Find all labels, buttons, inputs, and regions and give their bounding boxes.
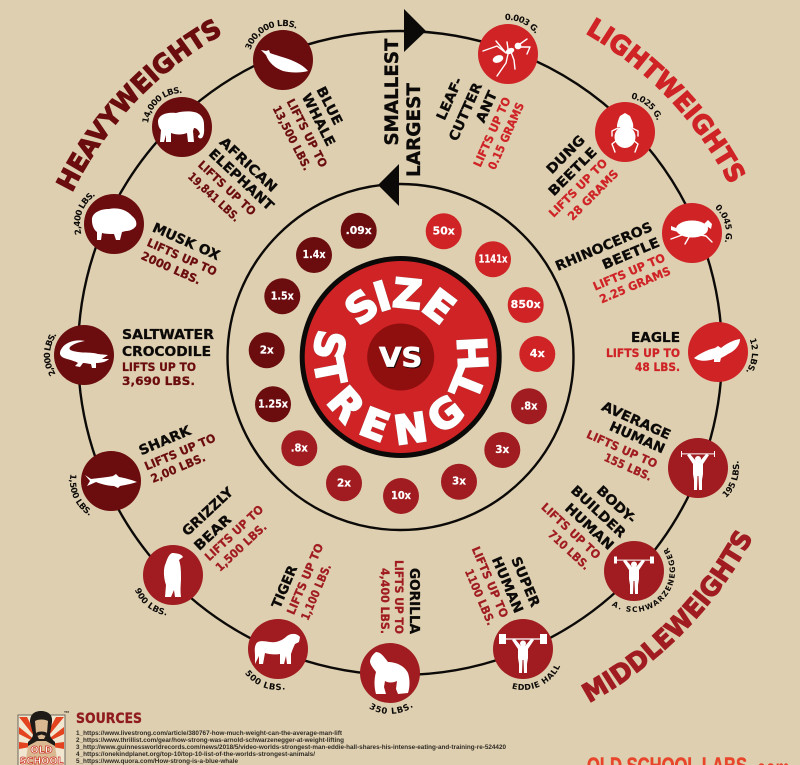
label: smallest: SMALLEST bbox=[381, 38, 403, 146]
icon: dung beetle bbox=[595, 102, 655, 162]
weight: 0.025 G. bbox=[632, 92, 661, 120]
text: 2,00 LBS. bbox=[149, 450, 207, 486]
sources list: 3_http://www.guinnessworldrecords.com/news/2018/5/video-worlds-strongest-man-eddie-hall-shares-his-intense-eating-and-training-re-524420 bbox=[76, 744, 506, 751]
multiplier bubbles: .09x bbox=[346, 225, 372, 237]
sources list: 4_https://onekindplanet.org/top-10/top-10-list-of-the-worlds-strongest-animals/ bbox=[76, 751, 315, 758]
text: LIFTS UP TO bbox=[469, 544, 511, 620]
text: BUILDER bbox=[567, 483, 629, 542]
heading: lightweights: LIGHTWEIGHTS bbox=[586, 17, 746, 182]
text: AVERAGE bbox=[599, 399, 673, 443]
panel: saltwater crocodile bbox=[44, 325, 215, 388]
weight: 500 LBS. bbox=[245, 670, 285, 690]
central badge: size vs strength bbox=[300, 256, 502, 458]
multiplier bubbles: 50x bbox=[433, 226, 455, 238]
text: 1100 LBS. bbox=[462, 567, 498, 627]
text bbox=[139, 220, 223, 287]
text: 1,500 LBS. bbox=[212, 520, 270, 574]
logo: old school bbox=[18, 710, 69, 765]
icon: eddie hall lifter bbox=[493, 619, 553, 679]
text: HUMAN bbox=[561, 500, 617, 554]
multiplier bubbles: 10x bbox=[391, 490, 411, 502]
text bbox=[606, 330, 680, 374]
icon: tiger bbox=[248, 619, 308, 679]
logo: old school: TM bbox=[64, 710, 69, 714]
text: 4,400 LBS. bbox=[378, 568, 392, 634]
icon: elephant bbox=[152, 97, 212, 157]
arrow: smallest direction bbox=[404, 9, 426, 52]
panel: average human bbox=[584, 399, 740, 498]
text bbox=[538, 483, 639, 573]
icon: average lifter bbox=[668, 438, 728, 498]
vs label: VS bbox=[379, 342, 422, 374]
text: 3,690 LBS. bbox=[122, 374, 195, 388]
text bbox=[543, 132, 621, 223]
multiplier bubbles: 1141x bbox=[478, 254, 508, 266]
multiplier bubbles: 1.5x bbox=[271, 290, 294, 302]
text: 1,100 LBS. bbox=[298, 562, 334, 622]
sources list bbox=[76, 730, 506, 765]
panel: super human bbox=[462, 544, 560, 690]
heading: middleweights: MIDDLEWEIGHTS bbox=[580, 530, 752, 703]
panel: tiger bbox=[245, 541, 334, 690]
multiplier bubbles: .8x bbox=[520, 400, 538, 412]
icon: bear bbox=[143, 545, 203, 605]
text: LIFTS UP TO bbox=[195, 158, 259, 218]
text: HUMAN bbox=[488, 554, 526, 616]
text: 28 GRAMS bbox=[565, 167, 621, 223]
icon: musk ox bbox=[84, 194, 144, 254]
text bbox=[378, 560, 422, 635]
text: DUNG bbox=[543, 132, 589, 178]
text: MUSK OX bbox=[150, 220, 223, 264]
weight: 0.003 G. bbox=[505, 14, 538, 34]
text bbox=[122, 327, 215, 388]
text: BEETLE bbox=[600, 235, 662, 273]
panel: leaf-cutter ant bbox=[434, 14, 538, 172]
middle ring bbox=[228, 184, 574, 530]
multiplier bubbles: 3x bbox=[495, 444, 510, 456]
multiplier bubbles bbox=[249, 213, 555, 514]
weight: 2,000 LBS. bbox=[44, 334, 56, 376]
sources list: 5_https://www.quora.com/How-strong-is-a-blue-whale bbox=[76, 758, 238, 765]
text: LEAF- bbox=[434, 75, 466, 123]
text: 710 LBS. bbox=[545, 527, 593, 573]
text: LIFTS UP TO bbox=[546, 156, 610, 220]
text: SALTWATER bbox=[122, 327, 215, 343]
text: 48 LBS. bbox=[635, 360, 680, 374]
text: LIFTS UP TO bbox=[392, 560, 406, 634]
text: 13,500 LBS. bbox=[270, 103, 314, 173]
panel: musk ox bbox=[74, 192, 223, 287]
text: LIFTS UP TO bbox=[145, 235, 219, 279]
weight: 0.045 G. bbox=[716, 204, 732, 242]
weight: EDDIE HALL bbox=[512, 666, 560, 690]
icon: crocodile bbox=[54, 325, 114, 385]
text: CUTTER bbox=[446, 80, 486, 144]
icon: whale bbox=[253, 30, 313, 90]
panel: african elephant bbox=[142, 87, 280, 225]
multiplier bubbles: 4x bbox=[530, 348, 545, 360]
icon: schwarzenegger lifter bbox=[604, 541, 664, 601]
text: LIFTS UP TO bbox=[591, 250, 667, 293]
sources heading: SOURCES bbox=[76, 711, 142, 727]
weight: 900 LBS. bbox=[135, 588, 166, 616]
weight: 12 LBS. bbox=[746, 338, 758, 372]
text: LIFTS UP TO bbox=[538, 500, 604, 562]
text: GRIZZLY bbox=[179, 484, 237, 540]
panel: dung beetle bbox=[543, 92, 661, 223]
text: LIFTS UP TO bbox=[122, 360, 196, 374]
text: SUPER bbox=[507, 554, 543, 610]
text: 19,841 LBS. bbox=[185, 169, 243, 225]
weight: 2,400 LBS. bbox=[74, 192, 95, 235]
weight: 14,000 LBS. bbox=[142, 87, 182, 122]
multiplier bubbles: 850x bbox=[511, 299, 541, 311]
panel: eagle bbox=[606, 322, 758, 382]
weight: 195 LBS. bbox=[722, 461, 740, 498]
text: LIFTS UP TO bbox=[470, 95, 514, 169]
text bbox=[137, 423, 218, 486]
outer ring bbox=[78, 31, 722, 675]
multiplier bubbles: .8x bbox=[291, 442, 308, 454]
text bbox=[179, 484, 270, 574]
text: 155 LBS. bbox=[602, 450, 654, 484]
panel: rhinoceros beetle bbox=[553, 203, 732, 306]
text bbox=[462, 544, 543, 627]
icon: gorilla bbox=[360, 643, 420, 703]
text bbox=[584, 399, 673, 484]
text: ELEPHANT bbox=[205, 146, 277, 215]
icon: shark bbox=[81, 451, 141, 511]
weight: 350 LBS. bbox=[369, 703, 413, 714]
text: BEAR bbox=[191, 511, 235, 554]
icon: ant bbox=[478, 24, 538, 84]
text: LIFTS UP TO bbox=[142, 431, 218, 473]
text: RHINOCEROS bbox=[553, 219, 655, 275]
text: TIGER bbox=[269, 563, 301, 611]
panel: grizzly bear bbox=[135, 484, 270, 616]
panel: blue whale bbox=[245, 20, 345, 173]
icon: eagle bbox=[688, 322, 748, 382]
panel: body-builder human bbox=[538, 483, 676, 612]
text: LIFTS UP TO bbox=[584, 427, 660, 471]
text: WHALE bbox=[298, 91, 338, 149]
text: 2.25 GRAMS bbox=[597, 264, 673, 306]
sources list: 2_https://www.thrillist.com/gear/how-strong-was-arnold-schwarzenegger-at-weight-lifting bbox=[76, 737, 344, 744]
title word: size: SIZE bbox=[337, 270, 463, 335]
title word: strength: STRENGTH bbox=[303, 327, 498, 455]
text: LIFTS UP TO bbox=[284, 541, 326, 617]
multiplier bubbles: 2x bbox=[260, 344, 274, 356]
text bbox=[185, 134, 280, 225]
arrow: largest direction bbox=[378, 164, 399, 206]
text: AFRICAN bbox=[216, 134, 280, 196]
text: ANT bbox=[473, 88, 501, 125]
weight: 300,000 LBS. bbox=[245, 20, 296, 50]
text bbox=[434, 75, 527, 172]
text: SHARK bbox=[137, 423, 194, 459]
weight: A. SCHWARZENEGGER bbox=[612, 548, 676, 612]
multiplier bubbles: 2x bbox=[337, 478, 351, 490]
text bbox=[269, 541, 334, 622]
text bbox=[553, 219, 673, 306]
multiplier bubbles: 1.4x bbox=[302, 249, 326, 261]
text: LIFTS UP TO bbox=[284, 96, 330, 170]
text bbox=[270, 84, 345, 173]
text: LIFTS UP TO bbox=[202, 502, 266, 564]
sources list: 1_https://www.livestrong.com/article/380767-how-much-weight-can-the-average-man-lift bbox=[76, 730, 343, 737]
label: largest: LARGEST bbox=[403, 83, 425, 177]
text: 2000 LBS. bbox=[139, 249, 203, 287]
panel: gorilla bbox=[360, 560, 422, 714]
text: 0.15 GRAMS bbox=[485, 100, 527, 172]
text: CROCODILE bbox=[122, 344, 211, 360]
weight: 1,500 LBS. bbox=[68, 474, 90, 516]
text: LIFTS UP TO bbox=[606, 346, 680, 360]
heading: heavyweights: HEAVYWEIGHTS bbox=[56, 18, 220, 192]
text: GORILLA bbox=[406, 568, 422, 635]
text: EAGLE bbox=[631, 330, 680, 346]
icon: rhino beetle bbox=[662, 203, 722, 263]
text: HUMAN bbox=[607, 419, 667, 457]
multiplier bubbles: 3x bbox=[452, 476, 466, 488]
logo: old school: OLD bbox=[30, 745, 52, 756]
multiplier bubbles: 1.25x bbox=[258, 398, 288, 410]
panel: shark bbox=[68, 423, 218, 516]
text: BLUE bbox=[313, 84, 345, 128]
text: BODY- bbox=[593, 483, 639, 527]
text: BEETLE bbox=[545, 144, 601, 200]
